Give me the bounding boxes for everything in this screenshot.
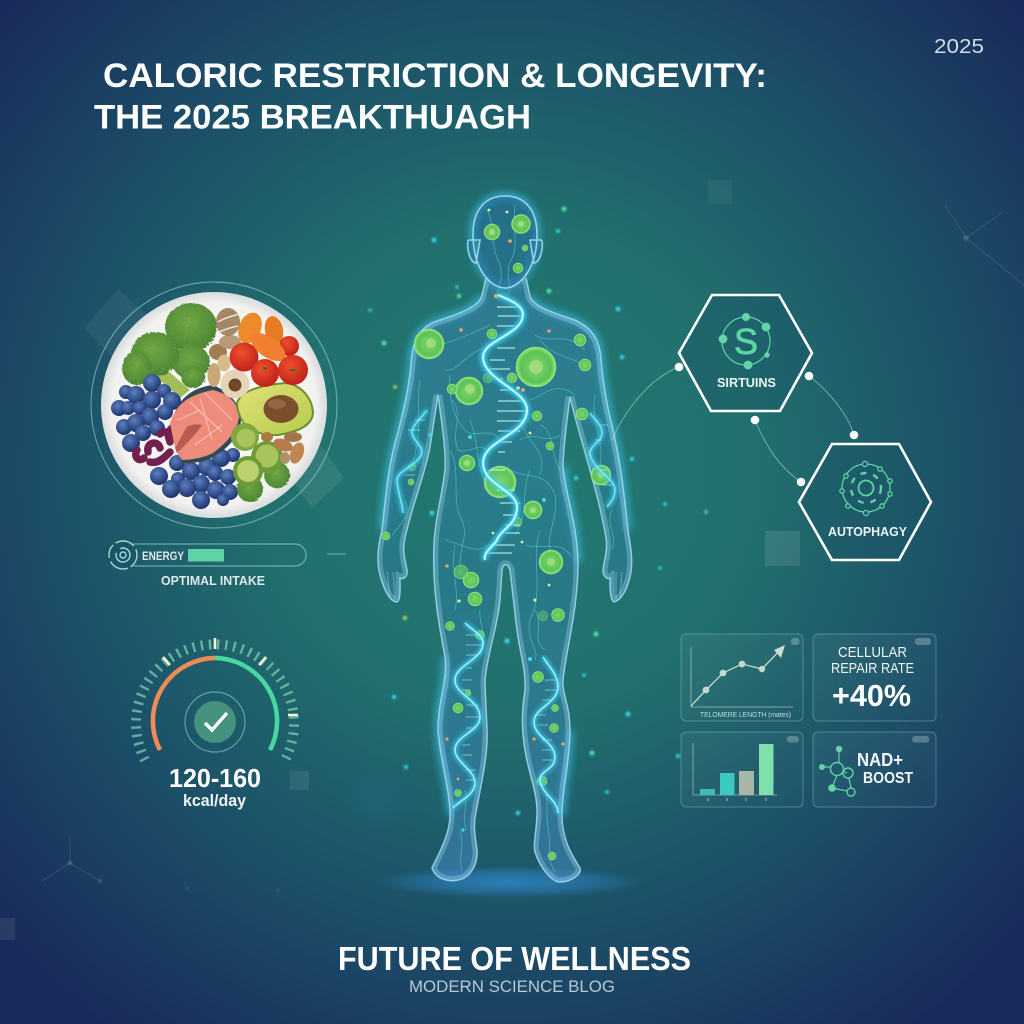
sirtuins label: SIRTUINS xyxy=(717,376,776,390)
panel: NAD+ boost: NAD+ xyxy=(857,750,903,770)
footer subheading: MODERN SCIENCE BLOG xyxy=(409,977,615,996)
arm and leg DNA helices xyxy=(397,410,615,813)
blueberries xyxy=(111,374,240,509)
gauge unit: kcal/day xyxy=(183,792,247,810)
carrots xyxy=(234,309,286,347)
floor glow xyxy=(376,866,644,898)
gauge ticks xyxy=(136,644,294,760)
axis label: TELOMERE LENGTH (mates) xyxy=(700,710,791,719)
head xyxy=(468,196,542,288)
hexagon: autophagy xyxy=(799,444,931,560)
tomatoes xyxy=(230,327,308,387)
title xyxy=(94,57,767,136)
cell nuclei xyxy=(426,221,604,566)
calorie gauge xyxy=(136,638,298,810)
purple beans xyxy=(136,428,172,462)
gauge check badge xyxy=(185,692,245,752)
main DNA helix xyxy=(483,295,527,560)
autophagy label: AUTOPHAGY xyxy=(828,524,907,539)
vessels xyxy=(392,205,614,872)
bar labels: 0 xyxy=(726,797,729,802)
panel: cellular repair rate xyxy=(813,634,936,721)
nuts xyxy=(208,308,307,466)
small coloured nodes xyxy=(428,209,565,832)
glass rim xyxy=(378,278,632,882)
plate xyxy=(101,292,327,518)
bar labels: 0 xyxy=(745,797,748,802)
pathway connectors xyxy=(612,363,858,486)
connector xyxy=(327,553,346,555)
title: CALORIC RESTRICTION & LONGEVITY: xyxy=(103,57,767,95)
panel: bar chart xyxy=(681,732,803,807)
panel: cellular repair rate: REPAIR RATE xyxy=(831,661,914,677)
floating particles xyxy=(368,207,708,815)
optimal intake label: OPTIMAL INTAKE xyxy=(161,574,265,588)
title: THE 2025 BREAKTHUAGH xyxy=(94,98,531,136)
plate of food xyxy=(91,282,337,528)
energy bar outline xyxy=(124,544,306,566)
gauge major ticks xyxy=(163,638,298,715)
panel: cellular repair rate: CELLULAR xyxy=(838,645,907,661)
panel: NAD+ boost xyxy=(813,732,936,807)
panel: telomere line chart xyxy=(681,634,803,721)
panel: cellular repair rate: +40% xyxy=(832,678,911,713)
hexagon: sirtuins xyxy=(679,295,812,411)
cells xyxy=(382,214,611,860)
energy bar xyxy=(109,541,346,569)
icon: sirtuins: S xyxy=(734,321,758,362)
bar labels xyxy=(707,797,768,802)
human body with DNA and cells xyxy=(378,196,632,882)
decorative squares and network marks xyxy=(0,180,1024,940)
energy label: ENERGY xyxy=(142,549,184,563)
salmon xyxy=(170,385,241,464)
line series xyxy=(691,645,785,706)
panel: NAD+ boost: BOOST xyxy=(863,770,913,787)
bar labels: 0 xyxy=(707,797,710,802)
gauge orange arc xyxy=(153,658,215,750)
icon: autophagy xyxy=(840,461,892,516)
bar labels: 0 xyxy=(765,797,768,802)
energy icon xyxy=(109,541,137,569)
gauge value: 120-160 xyxy=(169,763,261,793)
body silhouette xyxy=(378,278,632,882)
energy fill xyxy=(188,549,224,562)
gauge green arc xyxy=(215,658,277,750)
plate ring xyxy=(91,282,337,528)
footer heading: FUTURE OF WELLNESS xyxy=(338,940,691,977)
broccoli xyxy=(122,303,217,398)
avocado xyxy=(237,383,313,435)
icon: molecule xyxy=(819,746,855,796)
year label: 2025 xyxy=(934,36,984,58)
green vegetables xyxy=(231,423,290,502)
body outer glow xyxy=(382,196,628,815)
fingers xyxy=(387,572,622,600)
bars xyxy=(700,744,774,795)
